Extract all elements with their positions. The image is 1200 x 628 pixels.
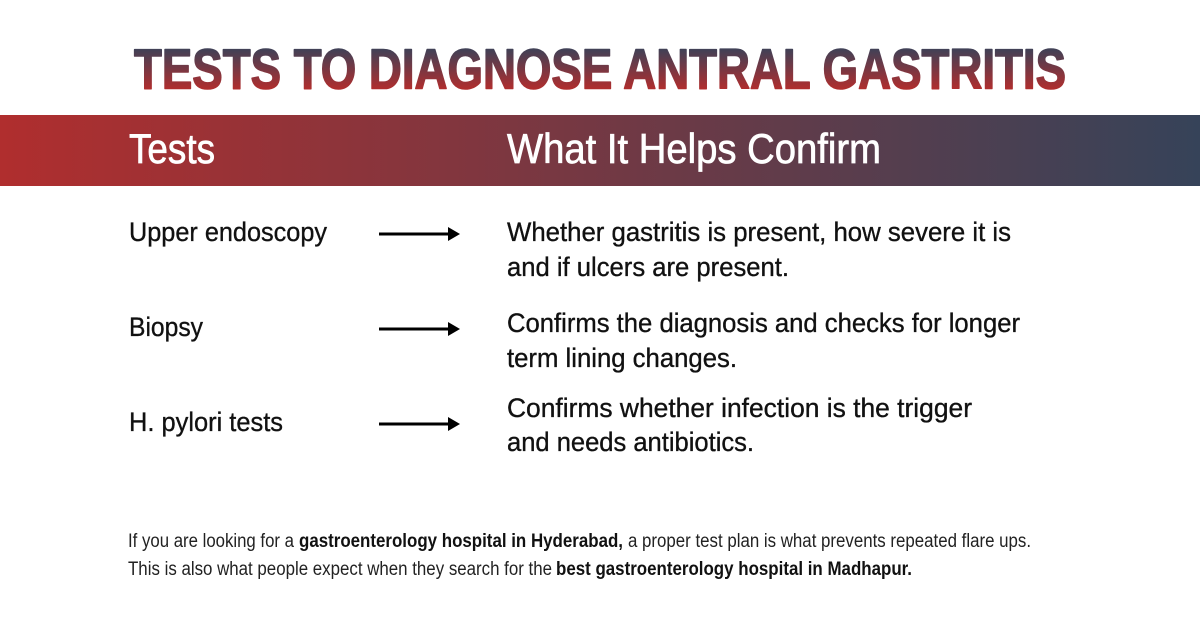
description [507, 393, 972, 457]
footer note: best gastroenterology hospital in Madhapur. [556, 559, 912, 580]
description: term lining changes. [507, 343, 737, 373]
footer note: gastroenterology hospital in Hyderabad, [299, 531, 623, 552]
test name: Biopsy [129, 312, 203, 342]
row: upper endoscopy [129, 217, 1011, 282]
description [507, 308, 1020, 373]
arrow [379, 322, 460, 336]
header band [0, 115, 1200, 186]
description [507, 217, 1011, 282]
footer note: If you are looking for a [128, 531, 294, 552]
description: and needs antibiotics. [507, 427, 754, 457]
description: Confirms the diagnosis and checks for longer [507, 308, 1020, 338]
column heading: what it helps confirm: What It Helps Confirm [507, 125, 881, 172]
row: biopsy [129, 308, 1020, 373]
description: Confirms whether infection is the trigger [507, 393, 972, 423]
row: h. pylori tests [129, 393, 972, 457]
arrow [379, 227, 460, 241]
footer note: a proper test plan is what prevents repeated flare ups. [628, 531, 1031, 552]
footer note [128, 531, 1031, 580]
column heading: tests: Tests [129, 125, 215, 172]
description: Whether gastritis is present, how severe it is [507, 217, 1011, 247]
arrow [379, 417, 460, 431]
description: and if ulcers are present. [507, 252, 789, 282]
test name: H. pylori tests [129, 407, 283, 437]
test name: Upper endoscopy [129, 217, 327, 247]
footer note: This is also what people expect when they search for the [128, 559, 552, 580]
